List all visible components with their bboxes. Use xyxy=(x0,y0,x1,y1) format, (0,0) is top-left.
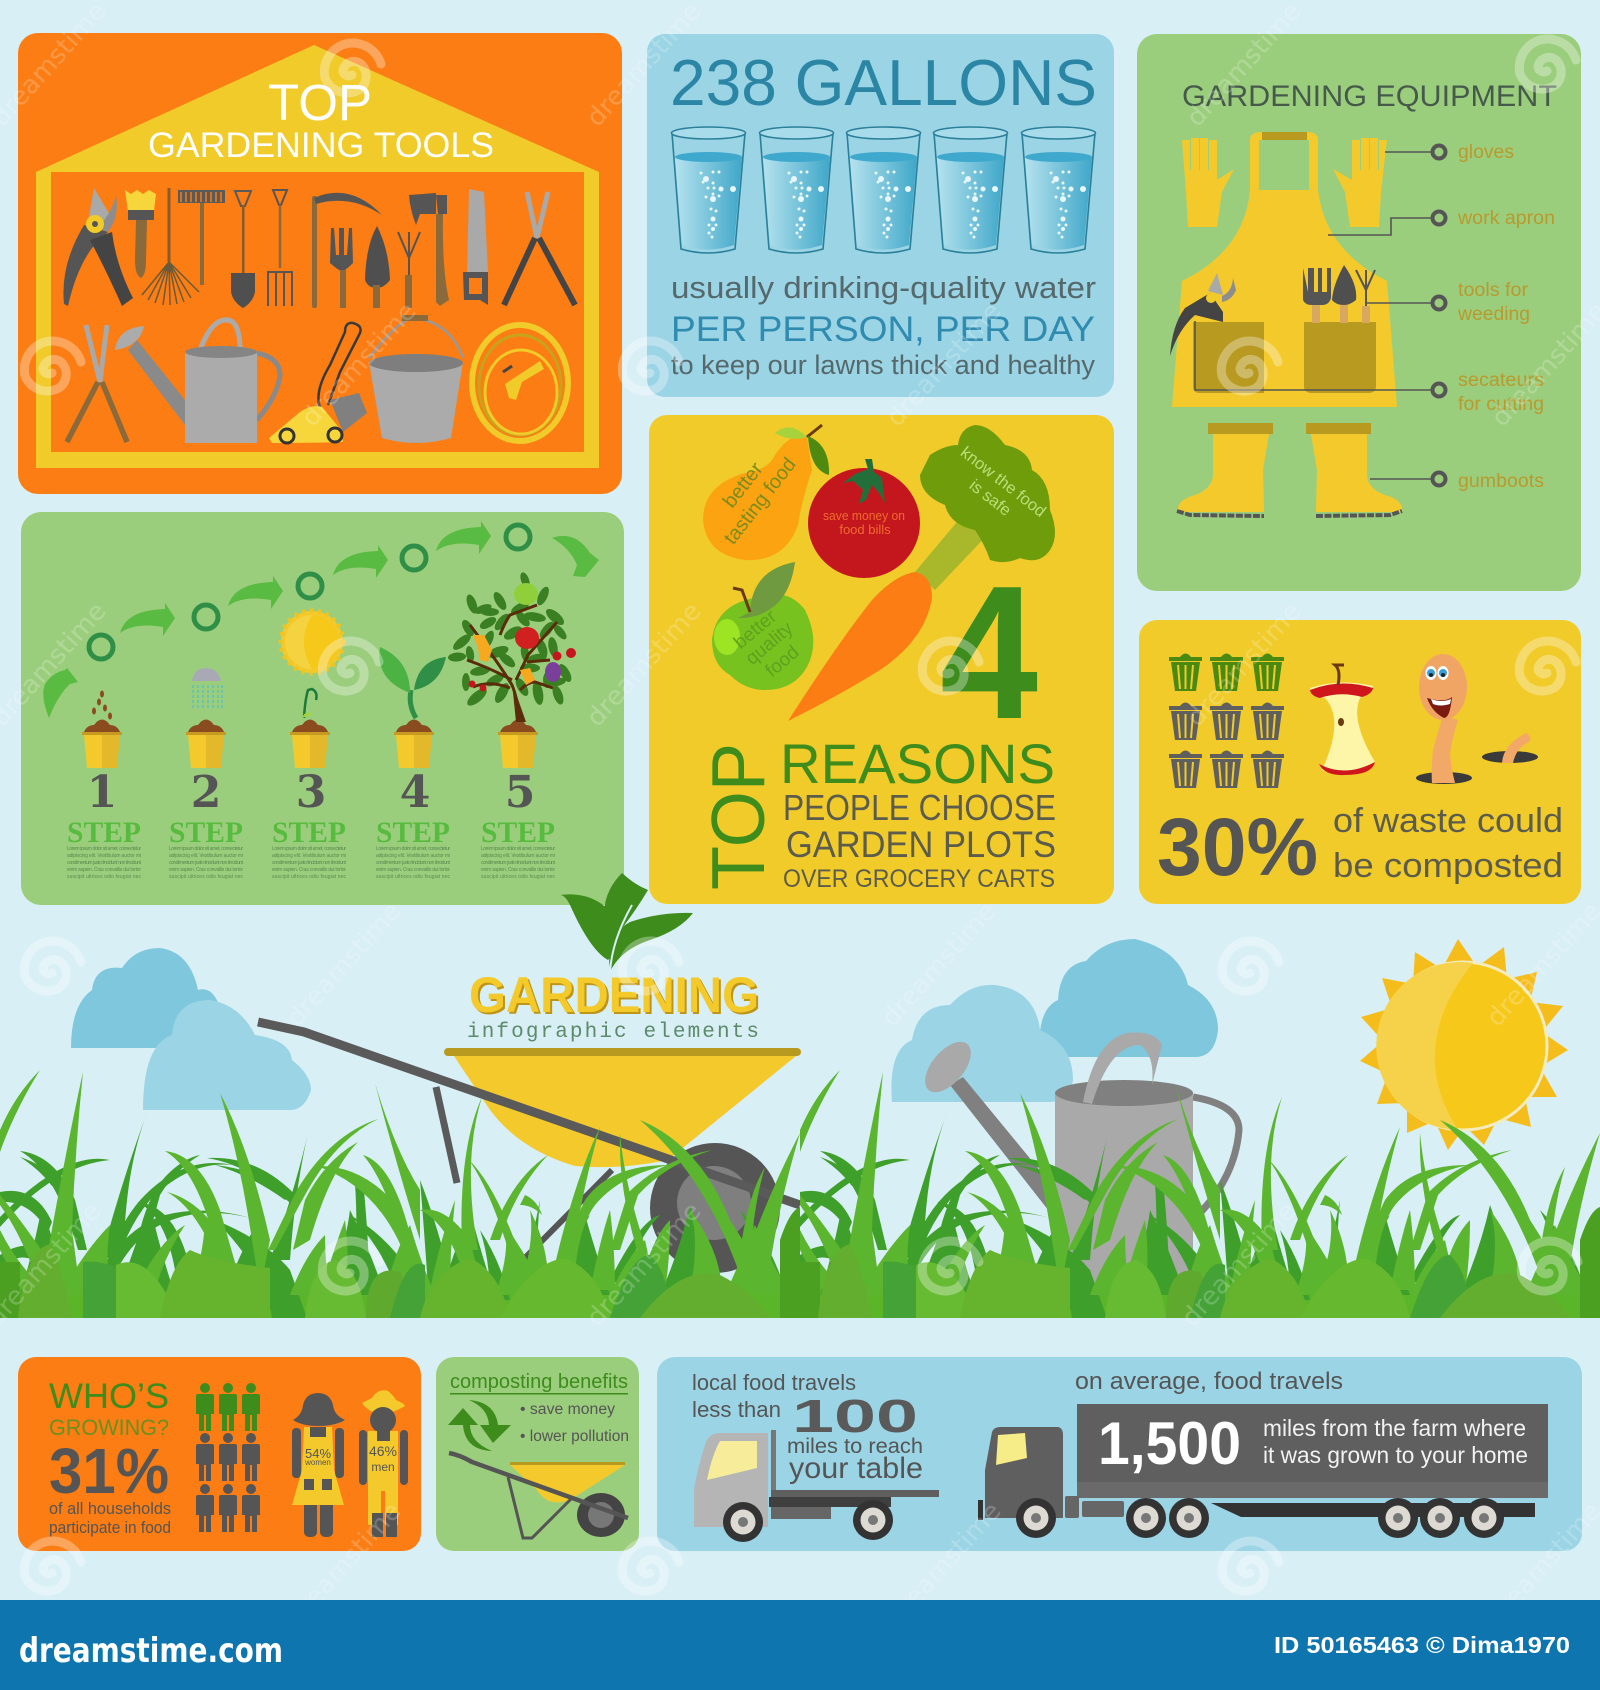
icon: worms xyxy=(1416,654,1538,784)
icon: clouds left xyxy=(71,948,311,1110)
panel: 30 percent compost xyxy=(1139,620,1581,904)
icon: carrot xyxy=(788,572,932,721)
icon: sickle xyxy=(312,193,382,308)
watermark text: dreamstime xyxy=(581,0,707,133)
plant pots xyxy=(82,720,538,768)
icon: leaf rake xyxy=(142,188,199,305)
step numbers: 4 xyxy=(400,767,430,818)
icon: seeds xyxy=(92,690,112,720)
icon: woman: 54% xyxy=(305,1446,331,1461)
text: households: participate in food xyxy=(49,1518,171,1537)
icon: tomato xyxy=(808,459,920,578)
lorem ipsum step text: Lorem ipsum dolor sit amet, consectetur xyxy=(376,846,450,852)
text: people choose: PEOPLE CHOOSE xyxy=(783,787,1056,828)
icon: apple core xyxy=(1310,665,1375,775)
icon: bucket xyxy=(369,315,463,443)
divider xyxy=(450,1393,628,1394)
lorem ipsum step text: condimentum justo tincidunt non tincidunt xyxy=(376,860,451,866)
heading: composting benefits: composting benefits xyxy=(450,1371,628,1393)
lorem ipsum step text: Lorem ipsum dolor sit amet, consectetur xyxy=(272,846,346,852)
watermark text: dreamstime xyxy=(281,897,407,1033)
lorem ipsum step text: adipiscing elit. Vestibulum auctor mi xyxy=(67,853,141,859)
panel: gardening equipment xyxy=(1137,34,1581,591)
icon: hedge shears xyxy=(504,192,575,305)
icon: sun large xyxy=(1360,939,1568,1150)
watermark text: dreamstime xyxy=(881,297,1007,433)
icon: people grid xyxy=(196,1383,260,1532)
icon: tomato: save money on xyxy=(823,508,905,523)
step numbers: 3 xyxy=(296,767,326,818)
equipment labels: gloves xyxy=(1458,142,1514,163)
icon: pear xyxy=(703,425,829,560)
text: local food travels: less than xyxy=(692,1397,781,1422)
icon: apple xyxy=(712,562,813,690)
icon: apron tools xyxy=(1170,265,1375,356)
text: garden plots: GARDEN PLOTS xyxy=(786,824,1056,865)
grass border xyxy=(0,1070,1600,1318)
watermark text: dreamstime xyxy=(1176,1197,1302,1333)
title: gardening: GARDENING xyxy=(469,967,759,1023)
icon: garden fork xyxy=(268,190,292,306)
lorem ipsum step text: adipiscing elit. Vestibulum auctor mi xyxy=(376,853,450,859)
icon: shears with wooden handles xyxy=(67,325,127,442)
icon: broccoli: is safe xyxy=(966,476,1014,520)
icon: fruit tree xyxy=(448,571,576,722)
icon: man xyxy=(359,1390,408,1537)
text: local food travels: local food travels xyxy=(692,1370,856,1395)
lorem ipsum step text: Lorem ipsum dolor sit amet, consectetur xyxy=(169,846,243,852)
icon: lawn mower xyxy=(269,323,367,443)
lorem ipsum step text: enim sapien. Cras convallis dui tortor xyxy=(376,867,450,873)
icon: broccoli xyxy=(915,425,1055,590)
heading: TOP: TOP xyxy=(268,74,372,131)
title: gardening: GARDENING xyxy=(471,969,761,1025)
step labels: STEP xyxy=(376,816,450,849)
equipment labels: for cutting xyxy=(1458,394,1544,415)
icon: woman xyxy=(292,1393,345,1537)
icon: large truck xyxy=(978,1404,1548,1538)
icon: apple: better xyxy=(730,606,781,653)
step labels: STEP xyxy=(67,816,141,849)
watermark text: dreamstime xyxy=(581,597,707,733)
lorem ipsum step text: condimentum justo tincidunt non tincidunt xyxy=(481,860,556,866)
lorem ipsum step text: enim sapien. Cras convallis dui tortor xyxy=(67,867,141,873)
icon: recycle arrows xyxy=(448,1400,511,1451)
heading: top vertical: TOP xyxy=(696,743,780,890)
icon: pear: better xyxy=(719,458,768,512)
heading: gardening equipment: GARDENING EQUIPMENT xyxy=(1182,80,1557,113)
icon: secateurs xyxy=(63,188,133,306)
watermark text: dreamstime xyxy=(581,1197,707,1333)
bullets: • save money xyxy=(520,1401,615,1418)
lorem ipsum step text: Lorem ipsum dolor sit amet, consectetur xyxy=(67,846,141,852)
lorem ipsum step text: suscipit ultrices odio feugiat nec xyxy=(481,874,556,880)
equipment labels: tools for xyxy=(1458,280,1529,301)
icon: axe xyxy=(409,193,449,306)
text: on average: on average, food travels xyxy=(1075,1368,1343,1395)
icon: yellow shed frame xyxy=(36,45,599,468)
icon: small truck xyxy=(694,1430,939,1542)
lorem ipsum step text: condimentum justo tincidunt non tincidunt xyxy=(67,860,142,866)
watermark text: dreamstime xyxy=(876,897,1002,1033)
step labels: STEP xyxy=(272,816,346,849)
equipment labels: gumboots xyxy=(1458,471,1544,492)
subtitle: infographic elements xyxy=(467,1021,759,1044)
icon: small wheelbarrow xyxy=(449,1453,628,1538)
icon: spade xyxy=(231,191,255,308)
step numbers: 1 xyxy=(87,767,117,818)
icon: gloves xyxy=(1182,138,1387,227)
icon: large watering can xyxy=(916,1032,1239,1313)
step labels: STEP xyxy=(169,816,243,849)
step labels xyxy=(67,816,555,849)
bullets xyxy=(520,1401,629,1445)
callout markers xyxy=(1432,146,1446,486)
leader lines xyxy=(1195,152,1431,479)
icon: garden rake xyxy=(178,190,225,285)
stat: 238 gallons: 238 GALLONS xyxy=(670,46,1097,119)
lorem ipsum step text: Lorem ipsum dolor sit amet, consectetur xyxy=(481,846,555,852)
lorem ipsum step text: adipiscing elit. Vestibulum auctor mi xyxy=(272,853,346,859)
icon: brush xyxy=(125,190,156,278)
panel: 238 gallons water xyxy=(647,34,1114,397)
text: over grocery carts: OVER GROCERY CARTS xyxy=(783,865,1055,893)
text: miles to reach: miles to reach xyxy=(787,1435,923,1458)
icon: five water glasses xyxy=(672,127,1096,253)
icon: woman: women xyxy=(304,1458,331,1467)
stat: 31 percent: 31% xyxy=(49,1435,169,1507)
icon: young plant xyxy=(379,647,446,718)
icon: watering can xyxy=(115,320,280,443)
footer bar xyxy=(0,1600,1600,1690)
lorem ipsum step text: condimentum justo tincidunt non tincidunt xyxy=(272,860,347,866)
arrows between steps xyxy=(43,521,599,718)
watermark text: dreamstime xyxy=(281,1497,407,1633)
equipment labels: work apron xyxy=(1457,208,1555,229)
icon: apple: quality xyxy=(742,618,798,669)
text: miles from farm: miles from the farm where xyxy=(1263,1415,1526,1441)
stat: 30 percent: 30% xyxy=(1157,802,1318,893)
icon: hand fork xyxy=(330,228,353,308)
text: miles from farm: it was grown to your home xyxy=(1263,1442,1528,1468)
lorem ipsum step text xyxy=(67,846,556,880)
lorem ipsum step text: suscipit ultrices odio feugiat nec xyxy=(272,874,346,880)
footer logo: dreamstime.com xyxy=(19,1631,283,1671)
icon: apple: food xyxy=(762,642,803,682)
lorem ipsum step text: suscipit ultrices odio feugiat nec xyxy=(376,874,450,880)
equipment labels: weeding xyxy=(1457,304,1530,325)
text: waste could be composted: be composted xyxy=(1333,847,1563,885)
title leaves xyxy=(560,873,693,972)
panel: top gardening tools xyxy=(18,33,622,494)
equipment labels xyxy=(1457,142,1555,492)
text: usually drinking-quality water: usually drinking-quality water xyxy=(671,270,1096,305)
heading: reasons: REASONS xyxy=(780,732,1055,795)
lorem ipsum step text: condimentum justo tincidunt non tincidunt xyxy=(169,860,244,866)
panel: food miles xyxy=(657,1357,1582,1551)
heading: who's growing: WHO’S xyxy=(49,1377,169,1416)
heading: GARDENING TOOLS: GARDENING TOOLS xyxy=(148,126,494,165)
icon: trowel xyxy=(365,226,390,308)
panel: who's growing xyxy=(18,1357,421,1551)
icon: sun xyxy=(281,611,343,673)
lorem ipsum step text: enim sapien. Cras convallis dui tortor xyxy=(481,867,555,873)
icon: tomato: food bills xyxy=(839,522,891,537)
step labels: STEP xyxy=(481,816,555,849)
text: waste could be composted xyxy=(1333,802,1563,885)
lorem ipsum step text: enim sapien. Cras convallis dui tortor xyxy=(169,867,243,873)
text: households: of all households xyxy=(49,1499,171,1518)
lorem ipsum step text: adipiscing elit. Vestibulum auctor mi xyxy=(481,853,555,859)
panel: five steps xyxy=(21,512,624,905)
icon: man: 46% xyxy=(369,1443,397,1459)
icon: saw xyxy=(463,189,488,305)
icon: apron xyxy=(1172,132,1397,407)
icon: hose with nozzle xyxy=(472,325,568,441)
icon: clouds right xyxy=(891,939,1218,1102)
icon: shower xyxy=(192,668,222,710)
panel: four reasons xyxy=(649,415,1114,904)
numeral 4: 4 xyxy=(940,547,1038,759)
stat: 1,500: 1,500 xyxy=(1098,1410,1241,1477)
icon: large wheelbarrow xyxy=(258,1022,801,1273)
watermark text: dreamstime xyxy=(881,1497,1007,1633)
step numbers xyxy=(87,767,535,818)
icon: sprout xyxy=(302,689,316,718)
lorem ipsum step text: enim sapien. Cras convallis dui tortor xyxy=(272,867,346,873)
text: per person, per day: PER PERSON, PER DAY xyxy=(671,310,1095,349)
icon: cultivator xyxy=(398,232,420,308)
icon: man: men xyxy=(371,1460,395,1474)
watermark text: dreamstime xyxy=(1181,597,1307,733)
footer id: ID 50165463 © Dima1970 xyxy=(1274,1632,1570,1658)
bullets: • lower pollution xyxy=(520,1428,629,1445)
lorem ipsum step text: suscipit ultrices odio feugiat nec xyxy=(169,874,244,880)
icon: pear: tasting food xyxy=(720,454,801,549)
watermark text: dreamstime xyxy=(296,297,422,433)
lorem ipsum step text: adipiscing elit. Vestibulum auctor mi xyxy=(169,853,243,859)
step numbers: 2 xyxy=(191,767,221,818)
icon: gumboots xyxy=(1177,423,1402,516)
icon: broccoli: know the food xyxy=(957,443,1049,521)
icon: waste bins xyxy=(1169,654,1284,788)
subheading: GROWING? xyxy=(49,1415,169,1440)
text: your table: your table xyxy=(789,1452,923,1485)
panel: composting benefits xyxy=(436,1357,639,1551)
step numbers: 5 xyxy=(505,767,535,818)
text: lawns: to keep our lawns thick and healthy xyxy=(671,350,1095,380)
text: miles from farm xyxy=(1263,1415,1528,1468)
equipment labels: secateurs xyxy=(1458,370,1544,391)
text: households xyxy=(49,1499,171,1537)
watermark text: dreamstime xyxy=(1181,0,1307,133)
stat: 100: 100 xyxy=(792,1390,918,1442)
lorem ipsum step text: suscipit ultrices odio feugiat nec xyxy=(67,874,142,880)
text: local food travels xyxy=(692,1370,856,1422)
step circles xyxy=(89,525,530,659)
text: waste could be composted: of waste could xyxy=(1333,802,1563,840)
